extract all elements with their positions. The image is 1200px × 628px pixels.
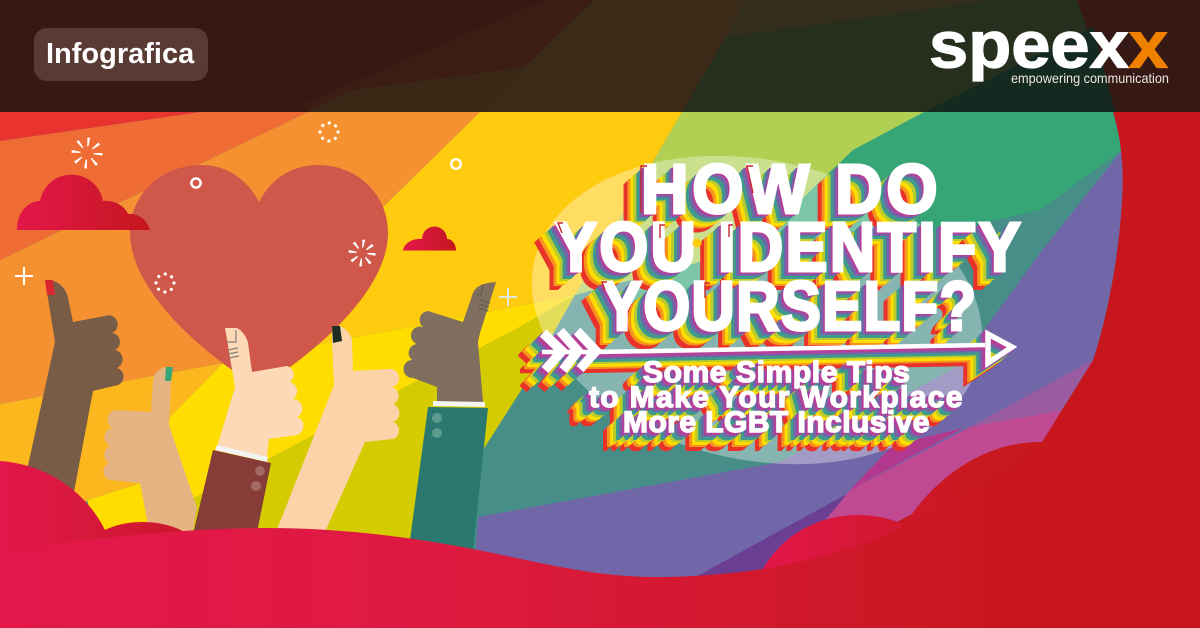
thumb: peach hand [276, 326, 399, 532]
top dark band [0, 0, 1200, 112]
dotted circle top [320, 123, 338, 141]
subtitle line 3: More LGBT Inclusive [623, 406, 930, 439]
right red hills [763, 442, 1093, 600]
foreground red wave [0, 442, 1200, 628]
plus sign left [15, 267, 33, 285]
sparkle on heart [352, 244, 372, 262]
subtitle line 2: to Make Your Workplace [589, 381, 964, 414]
ring on yellow [451, 159, 461, 169]
foreground red hills left [0, 461, 190, 570]
large red cloud [17, 175, 150, 230]
thumb: tan hand [103, 367, 197, 535]
pill: Infografica label: Infografica [46, 38, 195, 70]
speexx logo: speexx [929, 8, 1168, 82]
ring on heart [191, 178, 201, 188]
speexx logo: empowering communication [1011, 70, 1169, 86]
heart [130, 165, 388, 388]
dotted circle on heart [156, 274, 174, 292]
title line 2: YOU IDENTIFY [555, 208, 1023, 286]
thumb: pale hand with maroon sleeve [193, 328, 303, 534]
sparkle top left [76, 142, 98, 164]
title line 1: HOW DO [641, 150, 941, 228]
title line 3: YOURSELF? [602, 267, 977, 345]
plus sign right [499, 288, 517, 306]
thumb: dark brown hand [27, 280, 124, 492]
thumb: grey-brown hand with teal sleeve [403, 282, 496, 552]
small red cloud [403, 226, 456, 250]
subtitle line 1: Some Simple Tips [643, 356, 910, 389]
pill: Infografica label [34, 28, 208, 81]
